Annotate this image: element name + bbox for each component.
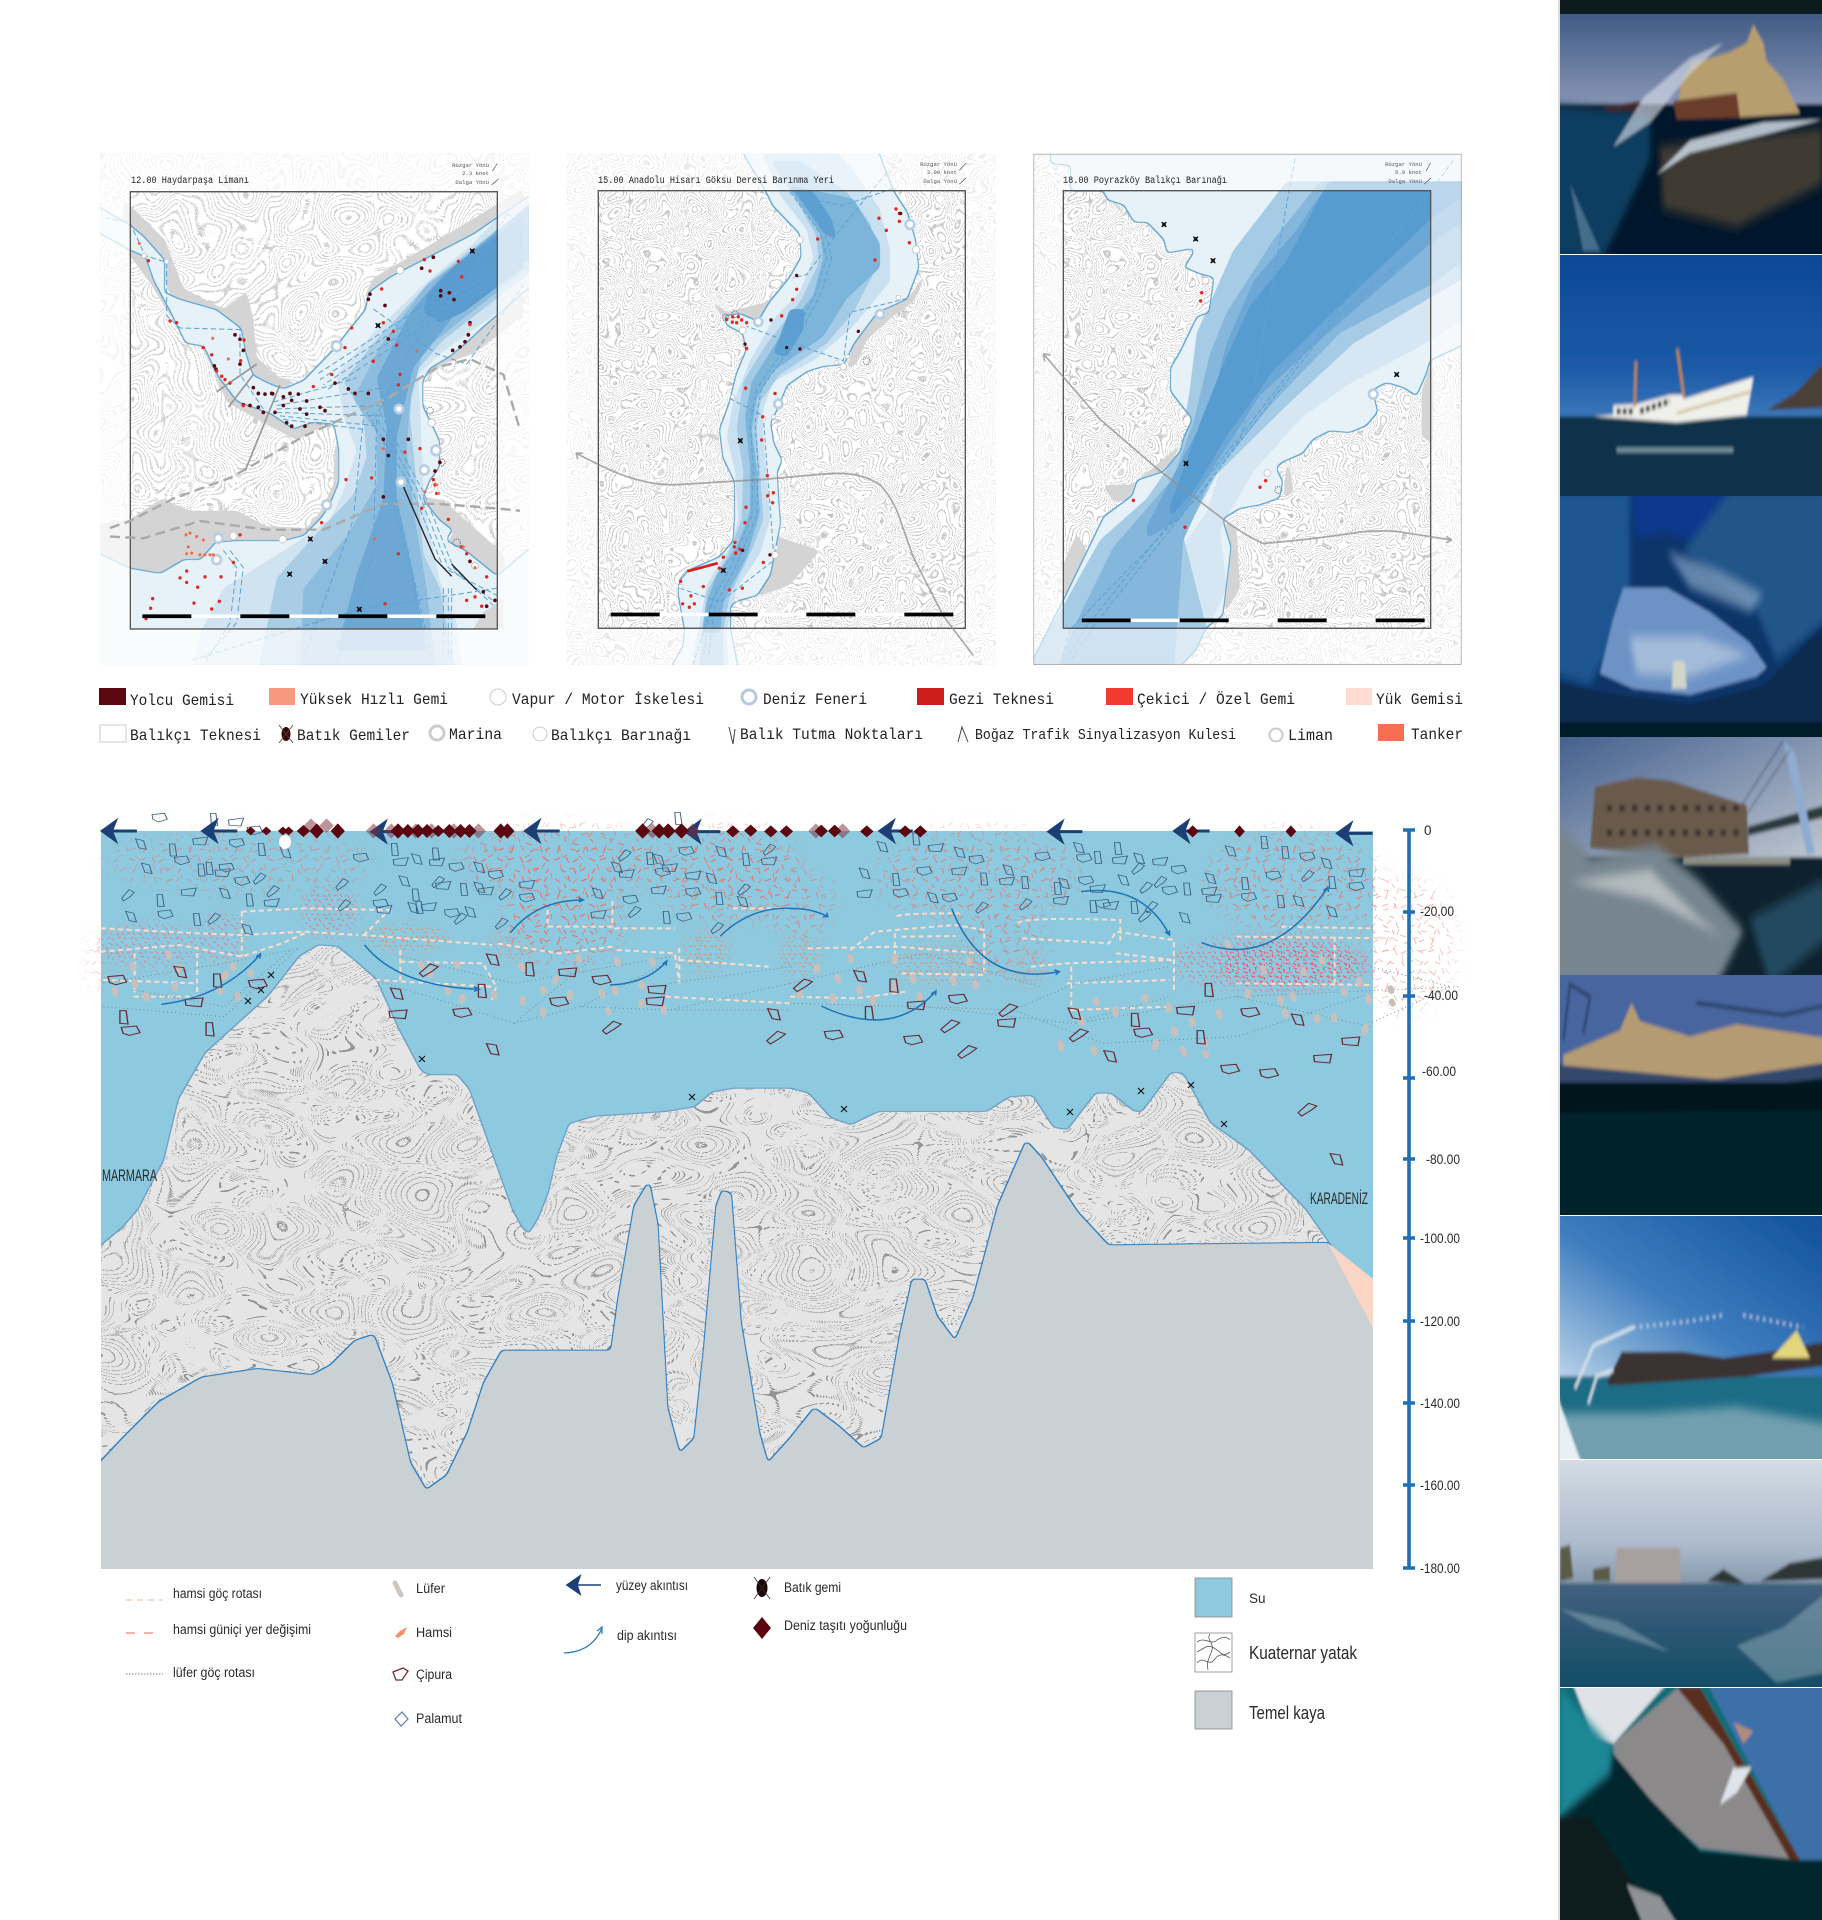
- bedrock: [101, 1144, 1373, 1569]
- legend: hamsi göç rotası: [126, 1586, 262, 1601]
- peach hamsi migration route: [101, 900, 790, 1003]
- legend item: Liman: Liman: [1288, 727, 1333, 745]
- seabed and bedrock group: [101, 944, 1373, 1569]
- legend: Lüfer: [395, 1581, 445, 1596]
- legend item: Yolcu Gemisi: Yolcu Gemisi: [130, 692, 234, 710]
- map title: 12.00 Haydarpaşa Limanı: [131, 175, 249, 187]
- legend: Çipura: [393, 1667, 452, 1682]
- surface white marker: [279, 835, 291, 849]
- peach hamsi migration route east: [790, 913, 1393, 1010]
- legend: Batık gemi: [754, 1577, 841, 1599]
- photo: Üsküdar splash: [1560, 1216, 1822, 1459]
- legend item: Yüksek Hızlı Gemi: [269, 688, 448, 709]
- legend item: Gezi Teknesi: Gezi Teknesi: [949, 691, 1054, 709]
- legend item: Balıkçı Teknesi: Balıkçı Teknesi: [130, 727, 261, 745]
- depth axis: -20.00: [1420, 904, 1454, 919]
- lüfer fish: [115, 953, 664, 1015]
- depth axis: [1403, 823, 1460, 1576]
- legend item: Çekici / Özel Gemi: Çekici / Özel Gemi: [1137, 690, 1295, 709]
- wind and wave info: 3.00 knot: [927, 169, 957, 176]
- palamut fish east: [864, 839, 1357, 918]
- wind and wave info: Rüzgar Yönü: [1385, 161, 1422, 168]
- legend: dip akıntısı: dip akıntısı: [617, 1628, 677, 1643]
- legend item: Tanker: Tanker: [1411, 726, 1463, 744]
- legend item: Marina: [430, 726, 502, 744]
- photo: Beylerbeyi palace and bridge: [1560, 737, 1822, 975]
- map title: 15.00 Anadolu Hisarı Göksu Deresi Barınma Yeri: [598, 175, 834, 187]
- vessel density diamonds: [246, 818, 793, 839]
- legend item: Yüksek Hızlı Gemi: Yüksek Hızlı Gemi: [300, 691, 448, 709]
- legend: section symbols: [126, 1576, 1358, 1729]
- salmon wedge: [1328, 1243, 1373, 1328]
- panel: map 15.00 Anadolu Hisarı Göksu Deresi Barınma Yeri: [567, 130, 996, 688]
- legend item: Boğaz Trafik Sinyalizasyon Kulesi: Boğaz Trafik Sinyalizasyon Kulesi: [975, 728, 1236, 744]
- wind and wave info: [920, 161, 957, 185]
- legend: lüfer göç rotası: [126, 1665, 255, 1680]
- dip akıntısı arcs: [161, 898, 790, 1004]
- photo: ferry on the Bosphorus: [1550, 245, 1822, 502]
- dip akıntısı arcs east: [790, 887, 1328, 1020]
- wind and wave info: Rüzgar Yönü: [452, 162, 489, 169]
- depth axis: -40.00: [1424, 988, 1458, 1003]
- legend item: Gezi Teknesi: [917, 688, 1054, 709]
- legend: Palamut: [395, 1711, 462, 1726]
- wind and wave info: [452, 162, 489, 186]
- legend: map symbols: [99, 688, 1463, 745]
- chart: Bosphorus cross-section: [61, 800, 1480, 1604]
- legend item: Tanker: [1378, 724, 1463, 744]
- photo: Selimiye reflection: [1560, 975, 1822, 1215]
- çipura fish east: [803, 976, 1352, 1159]
- depth axis: -80.00: [1426, 1152, 1460, 1167]
- legend: yüzey akıntısı: [567, 1576, 688, 1594]
- legend: Su: [1195, 1578, 1266, 1617]
- legend: Batık gemi: Batık gemi: [784, 1580, 841, 1595]
- depth axis: -60.00: [1422, 1064, 1456, 1079]
- panel: map 18.00 Poyrazköy Balıkçı Barınağı: [1033, 154, 1462, 665]
- label: MARMARA: MARMARA: [102, 1166, 157, 1185]
- photo: Küçüksu pavilion: [1560, 1460, 1822, 1687]
- wind and wave info: Dalga Yönü: [923, 178, 957, 185]
- legend item: Yük Gemisi: Yük Gemisi: [1376, 691, 1463, 709]
- depth axis: -100.00: [1420, 1231, 1460, 1246]
- depth axis: -180.00: [1420, 1561, 1460, 1576]
- surface current arrows east: [880, 822, 1373, 842]
- wind and wave info: Dalga Yönü: [1388, 178, 1422, 185]
- çipura fish: [117, 959, 777, 1049]
- wind and wave info: 2.3 knot: [462, 170, 489, 177]
- panel: map 12.00 Haydarpaşa Limanı: [100, 154, 528, 665]
- legend: Deniz taşıtı yoğunluğu: Deniz taşıtı yoğunluğu: [784, 1618, 907, 1633]
- depth axis: 0: [1424, 823, 1432, 838]
- legend item: Liman: [1270, 727, 1333, 745]
- legend: Çipura: Çipura: [416, 1667, 452, 1682]
- map title: 18.00 Poyrazköy Balıkçı Barınağı: [1063, 175, 1227, 187]
- wind and wave info: Rüzgar Yönü: [920, 161, 957, 168]
- legend item: Batık Gemiler: Batık Gemiler: [297, 727, 410, 745]
- legend item: Vapur / Motor İskelesi: Vapur / Motor İskelesi: [512, 690, 704, 709]
- legend: Hamsi: Hamsi: [416, 1625, 452, 1640]
- legend: hamsi güniçi yer değişimi: hamsi güniçi yer değişimi: [173, 1622, 311, 1637]
- legend item: Balık Tutma Noktaları: Balık Tutma Noktaları: [740, 726, 923, 744]
- photo column edge: [1558, 0, 1560, 1920]
- legend: Temel kaya: [1195, 1691, 1326, 1729]
- legend: Deniz taşıtı yoğunluğu: [753, 1617, 907, 1639]
- legend: Su: Su: [1249, 1591, 1266, 1606]
- photo: Maiden's Tower through a wave: [1550, 490, 1822, 741]
- vessel density diamonds east: [808, 823, 1296, 839]
- wind and wave info: [1385, 161, 1422, 185]
- legend: dip akıntısı: [564, 1627, 677, 1653]
- palamut fish: [128, 817, 769, 929]
- photo: Haydarpaşa through water: [1560, 14, 1822, 254]
- wind and wave info: 5.9 knot: [1395, 169, 1422, 176]
- lüfer dotted route east: [790, 953, 1460, 1043]
- quaternary bed: [101, 946, 1328, 1489]
- legend: Temel kaya: Temel kaya: [1249, 1703, 1326, 1723]
- surface current arrows: [103, 822, 720, 841]
- legend: yüzey akıntısı: yüzey akıntısı: [616, 1578, 688, 1593]
- legend item: Balıkçı Teknesi: [100, 725, 261, 745]
- legend: Lüfer: Lüfer: [416, 1581, 445, 1596]
- bed outline: [101, 944, 1332, 1246]
- legend item: Çekici / Özel Gemi: [1106, 688, 1295, 709]
- legend: hamsi göç rotası: hamsi göç rotası: [173, 1586, 262, 1601]
- depth axis: -120.00: [1420, 1314, 1460, 1329]
- depth axis: -140.00: [1420, 1396, 1460, 1411]
- hamsi daily movement dashes: [80, 814, 1464, 1020]
- legend: Hamsi: [395, 1625, 452, 1640]
- sunken ship markers: [245, 972, 1227, 1127]
- legend: Palamut: Palamut: [416, 1711, 462, 1726]
- lüfer dotted route: [103, 947, 790, 1023]
- lüfer fish east: [799, 943, 1393, 1055]
- legend item: Deniz Feneri: Deniz Feneri: [763, 691, 867, 709]
- photo: boat hull and fish: [1550, 1676, 1822, 1920]
- bedrock outline: [101, 1142, 1332, 1489]
- label: KARADENİZ: KARADENİZ: [1310, 1189, 1368, 1208]
- legend: Kuaternar yatak: Kuaternar yatak: [1249, 1643, 1358, 1663]
- legend: lüfer göç rotası: lüfer göç rotası: [173, 1665, 255, 1680]
- legend item: Yük Gemisi: [1346, 688, 1463, 709]
- depth axis: -160.00: [1420, 1478, 1460, 1493]
- wind and wave info: Dalga Yönü: [455, 179, 489, 186]
- legend item: Balıkçı Barınağı: Balıkçı Barınağı: [551, 727, 691, 745]
- photo strip top: [1560, 0, 1822, 14]
- legend item: Marina: Marina: [449, 726, 502, 744]
- legend item: Yolcu Gemisi: [99, 688, 234, 710]
- legend: Kuaternar yatak: [1195, 1633, 1358, 1672]
